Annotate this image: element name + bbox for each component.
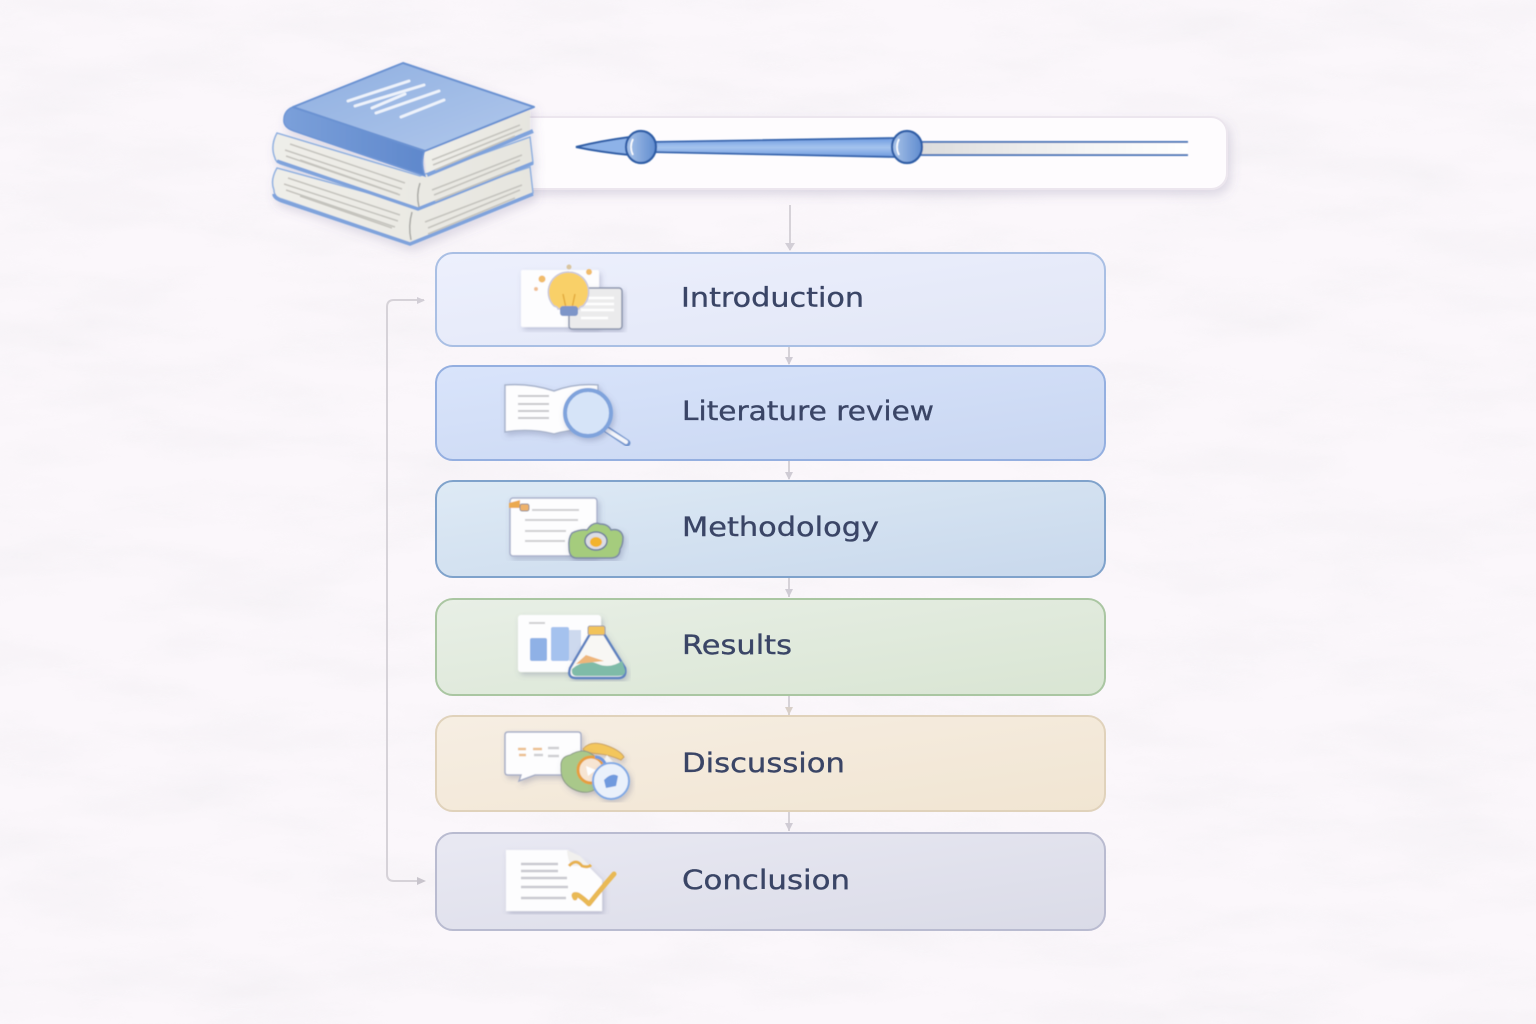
label: Methodology: Methodology xyxy=(682,512,879,543)
arrow: discussion to conclusion xyxy=(785,812,793,831)
icon: chart and flask xyxy=(518,615,625,678)
arrow: introduction to literature review xyxy=(785,347,793,365)
panel: Discussion xyxy=(436,716,1105,811)
arrow: literature review to methodology xyxy=(785,461,793,480)
arrow: top connector xyxy=(785,205,795,251)
arrow: methodology to results xyxy=(785,578,793,597)
top book xyxy=(284,63,534,176)
icon: stack of books xyxy=(273,63,534,244)
panel: top progress bar xyxy=(500,117,1227,189)
label: Results: Results xyxy=(682,630,792,661)
panel: Conclusion xyxy=(436,833,1105,930)
label: Literature review: Literature review xyxy=(682,396,934,427)
icon: progress needle xyxy=(576,131,1188,163)
icon: speech bubble and gears xyxy=(505,732,629,799)
panel: Introduction xyxy=(436,253,1105,346)
label: Conclusion: Conclusion xyxy=(682,865,850,896)
icon: open book and magnifier xyxy=(505,385,627,443)
bottom book xyxy=(273,167,533,244)
arrow: feedback loop bracket xyxy=(387,297,426,885)
label: Discussion: Discussion xyxy=(682,748,845,779)
cover highlights xyxy=(348,81,444,117)
icon: document and gear xyxy=(509,498,623,558)
label: Introduction: Introduction xyxy=(681,282,864,314)
panel: Methodology xyxy=(436,481,1105,577)
arrow: results to discussion xyxy=(785,696,793,715)
panel: Literature review xyxy=(436,366,1105,460)
icon: light bulb and note xyxy=(521,264,622,329)
panel: Results xyxy=(436,599,1105,695)
icon: document with check mark xyxy=(506,850,614,911)
middle book xyxy=(273,133,533,209)
